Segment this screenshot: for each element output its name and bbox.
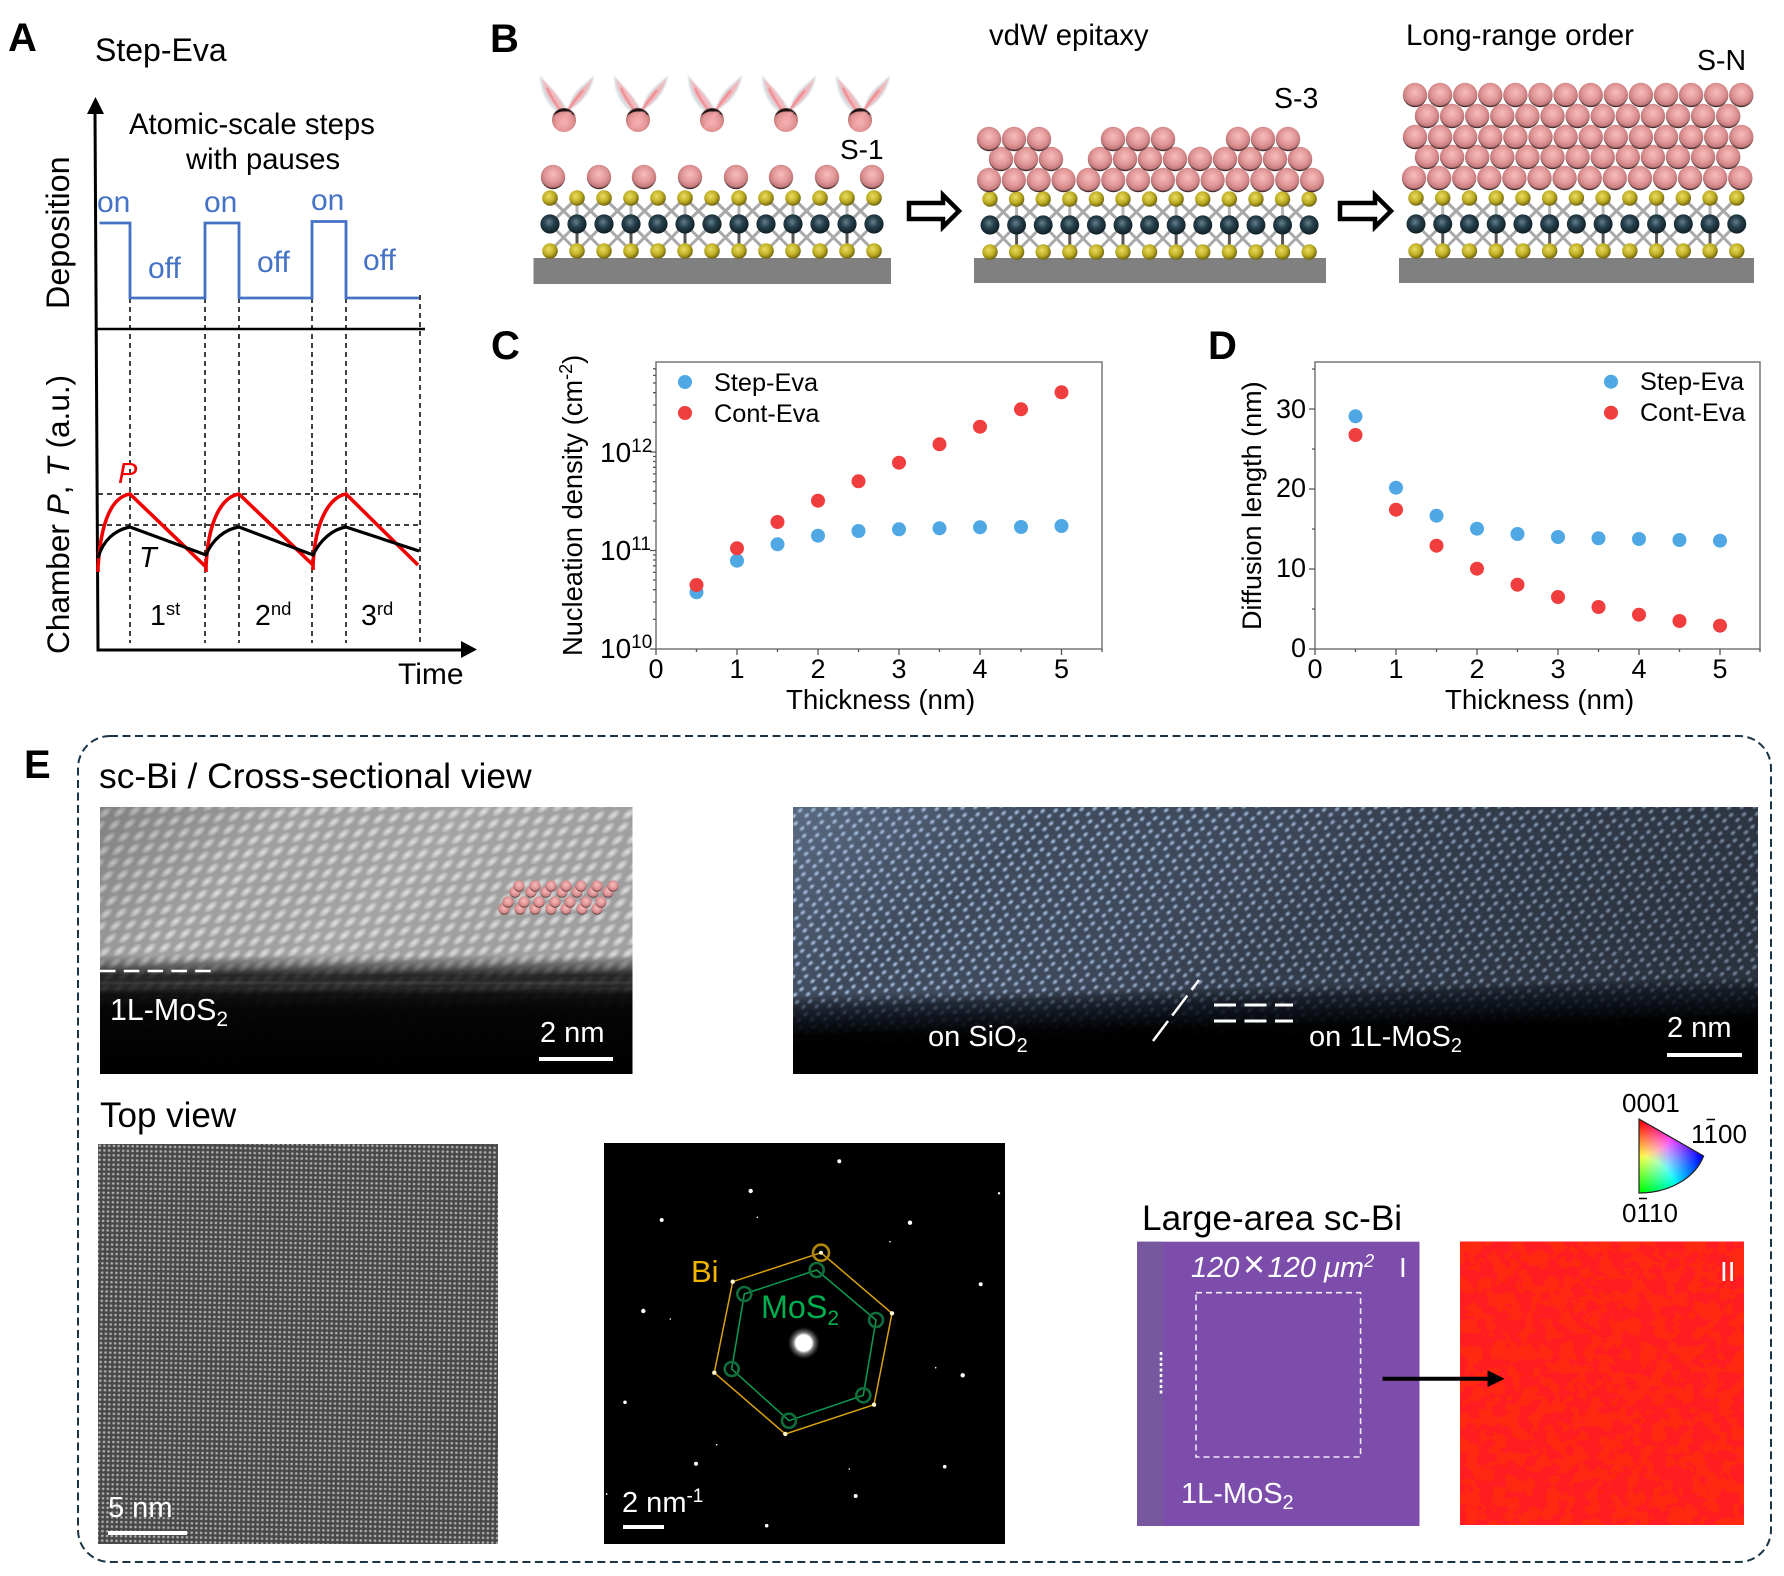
x tick labels: 1 (1388, 654, 1404, 684)
scale bar (1667, 1053, 1742, 1057)
legend (678, 369, 820, 428)
deposition waveform (100, 222, 419, 298)
heading: vdW epitaxy: vdW epitaxy (989, 19, 1149, 52)
x tick labels: 4 (1631, 654, 1647, 684)
y tick labels: 10 (1276, 553, 1306, 583)
x tick labels: 5 (1712, 654, 1728, 684)
heading: Large-area sc-Bi: Large-area sc-Bi (1142, 1199, 1402, 1238)
y axis title: -2 (556, 364, 576, 380)
diffraction pattern (604, 1143, 1005, 1544)
caption: atomic-scale steps: Atomic-scale steps (129, 108, 375, 141)
arrow: stage 1 to 3 (909, 195, 959, 227)
panel E: microscopy (24, 736, 1771, 1562)
legend: Cont-Eva (1640, 399, 1746, 427)
heading: Long-range order: Long-range order (1406, 19, 1634, 52)
axes with arrowheads (87, 97, 477, 658)
x label: Time: Time (398, 658, 464, 691)
key label 1-100: 1100 (1691, 1119, 1747, 1149)
interface dashed line (100, 970, 211, 972)
stage label S-N: S-N (1697, 45, 1746, 77)
MoS2 hexagon (732, 1270, 876, 1421)
legend: Step-Eva (1640, 368, 1745, 396)
scale text: 5 nm (108, 1492, 172, 1524)
key label 0001: 0001 (1622, 1088, 1680, 1118)
atom overlay (498, 880, 619, 915)
Bi marker circle (813, 1245, 829, 1261)
key wedge (1640, 1120, 1703, 1192)
area label: 120×120 μm (1191, 1244, 1364, 1286)
x tick labels: 5 (1054, 654, 1069, 684)
y tick labels: 30 (1276, 394, 1306, 424)
dashed border (78, 736, 1771, 1562)
Bi islands (977, 127, 1324, 192)
x tick labels: 0 (1307, 654, 1323, 684)
EBSD map II (1460, 1242, 1744, 1525)
curve label T: T (139, 542, 159, 574)
cont-eva series (1348, 428, 1727, 633)
on/off labels: off (257, 246, 290, 279)
optical image I (1137, 1242, 1420, 1526)
y axis title: Diffusion length (nm) (1237, 381, 1267, 630)
label 1L-MoS2: 2 (1283, 1492, 1294, 1514)
legend: Cont-Eva (714, 400, 820, 428)
central beam spot (788, 1327, 820, 1359)
panel D: diffusion length chart (1208, 324, 1760, 715)
x tick labels: 2 (810, 654, 826, 684)
temperature curve (98, 527, 419, 558)
Bi hexagon (714, 1253, 892, 1434)
area label: 2 (1363, 1251, 1374, 1271)
x tick labels (648, 654, 1069, 684)
x axis title: Thickness (nm) (786, 684, 975, 715)
diffraction spots (606, 1159, 1000, 1527)
heading: cross-sectional view: sc-Bi / Cross-sectional view (99, 756, 532, 796)
scale bar (539, 1057, 613, 1061)
top-view lattice image (98, 1144, 498, 1544)
cycle labels: nd (271, 598, 291, 619)
label E: E (24, 743, 51, 787)
stage label S-1: S-1 (840, 134, 884, 165)
y tick labels: 10 (600, 633, 631, 664)
y axis title: Nucleation density (cm (557, 380, 588, 656)
caption: with pauses: with pauses (185, 144, 340, 176)
arrow: I to II (1383, 1370, 1505, 1387)
key outline (1639, 1119, 1704, 1193)
label Bi: Bi (691, 1254, 719, 1289)
label D: D (1208, 324, 1237, 368)
x tick labels: 1 (729, 654, 745, 684)
on/off labels: off (148, 252, 181, 285)
panel A: Step-Eva timing diagram (8, 16, 477, 691)
x tick labels: 4 (972, 654, 988, 684)
cycle labels (150, 598, 393, 632)
Bi adatoms (541, 165, 884, 189)
stage 3 (974, 127, 1326, 283)
step-eva series (1348, 409, 1727, 548)
label B: B (490, 17, 519, 61)
key label 0-110: 0110 (1622, 1198, 1678, 1228)
x axis title: Thickness (nm) (1445, 684, 1634, 715)
scale text: -1 (686, 1486, 703, 1507)
x tick labels (1307, 654, 1728, 684)
heading: Top view: Top view (100, 1096, 237, 1135)
plot frame (656, 362, 1102, 649)
label A: A (8, 16, 37, 60)
scale bar (108, 1531, 187, 1535)
MoS2 circles (725, 1263, 883, 1428)
MoS2 monolayer (981, 191, 1319, 260)
scale text: 2 nm (1667, 1012, 1731, 1044)
y tick labels: 12 (631, 436, 652, 457)
double dashed lines (1214, 1005, 1293, 1021)
label I: I (1399, 1252, 1407, 1283)
on/off labels: on (204, 186, 237, 219)
label II: II (1720, 1256, 1736, 1287)
y tick labels (1276, 394, 1306, 663)
panel C: nucleation density chart (491, 324, 1102, 715)
on/off labels (97, 184, 396, 285)
y axis title: ) (557, 355, 588, 364)
y tick labels: 0 (1291, 633, 1306, 663)
ticks (1309, 369, 1760, 655)
x tick labels: 3 (1550, 654, 1566, 684)
stage label S-3: S-3 (1274, 83, 1318, 115)
cycle labels: st (166, 598, 180, 619)
ticks (650, 369, 1102, 655)
STEM image: 1L-MoS2 (100, 807, 632, 1074)
MoS2 monolayer (1406, 190, 1746, 259)
scale bar (623, 1525, 664, 1529)
label on 1L-MoS2: 2 (1451, 1035, 1462, 1057)
curve label P: P (118, 458, 138, 490)
cycle labels: 1 (150, 600, 166, 632)
on/off labels: off (363, 244, 396, 277)
step-eva series (690, 519, 1068, 599)
cycle labels: rd (377, 598, 393, 619)
label 1L-MoS2: 1L-MoS (1181, 1478, 1283, 1510)
substrate (534, 258, 891, 284)
slanted dashed line (1153, 980, 1199, 1041)
on/off labels: on (97, 186, 130, 219)
plot frame (1315, 362, 1760, 649)
overbars (1639, 1120, 1715, 1198)
pressure curve (98, 494, 418, 572)
scale text: 2 nm (540, 1017, 604, 1049)
dashed region (1196, 1293, 1361, 1457)
on/off labels: on (311, 184, 344, 217)
cycle labels: 3 (361, 600, 377, 632)
legend (1604, 368, 1746, 427)
y tick labels: 10 (600, 535, 631, 566)
cont-eva series (690, 385, 1068, 592)
x tick labels: 3 (891, 654, 907, 684)
y tick labels: 20 (1276, 473, 1306, 503)
y tick labels (600, 436, 652, 664)
y label: Chamber P, T: Chamber P, T (a.u.) (40, 375, 76, 654)
y tick labels: 10 (600, 437, 631, 468)
orientation colour key (1622, 1088, 1747, 1228)
label on 1L-MoS2: on 1L-MoS (1309, 1021, 1451, 1053)
label C: C (491, 324, 520, 368)
continuous Bi film (1402, 83, 1754, 190)
label on SiO2: 2 (1017, 1035, 1028, 1057)
edge dotted line (1160, 1352, 1162, 1396)
STEM image: SiO2 and 1L-MoS2 (793, 807, 1758, 1074)
cycle labels: 2 (255, 600, 271, 632)
scale text: 2 nm (622, 1487, 686, 1519)
label MoS2: 2 (827, 1307, 839, 1330)
falling Bi atoms (540, 75, 890, 132)
stage 1 (534, 75, 891, 284)
dashed guide lines (98, 295, 420, 643)
substrate (974, 258, 1326, 283)
label 1L-MoS2: 1L-MoS (110, 993, 216, 1027)
arrow: stage 3 to N (1340, 195, 1391, 227)
legend: Step-Eva (714, 369, 819, 397)
bare substrate strip (1137, 1242, 1163, 1526)
label MoS2: MoS (761, 1289, 827, 1325)
stage N (1399, 83, 1754, 283)
label 1L-MoS2: 2 (216, 1008, 228, 1031)
y tick labels: 10 (631, 632, 652, 653)
Bi hexagon vertices (712, 1251, 894, 1436)
panel B: growth schematic (490, 17, 1754, 284)
MoS2 monolayer (540, 190, 884, 259)
x tick labels: 2 (1469, 654, 1485, 684)
title: Step-Eva: Step-Eva (95, 32, 227, 68)
label on SiO2: on SiO (928, 1021, 1017, 1053)
y tick labels: 11 (631, 534, 651, 555)
x tick labels: 0 (648, 654, 664, 684)
substrate (1399, 258, 1754, 283)
y label: Deposition: Deposition (40, 156, 76, 309)
